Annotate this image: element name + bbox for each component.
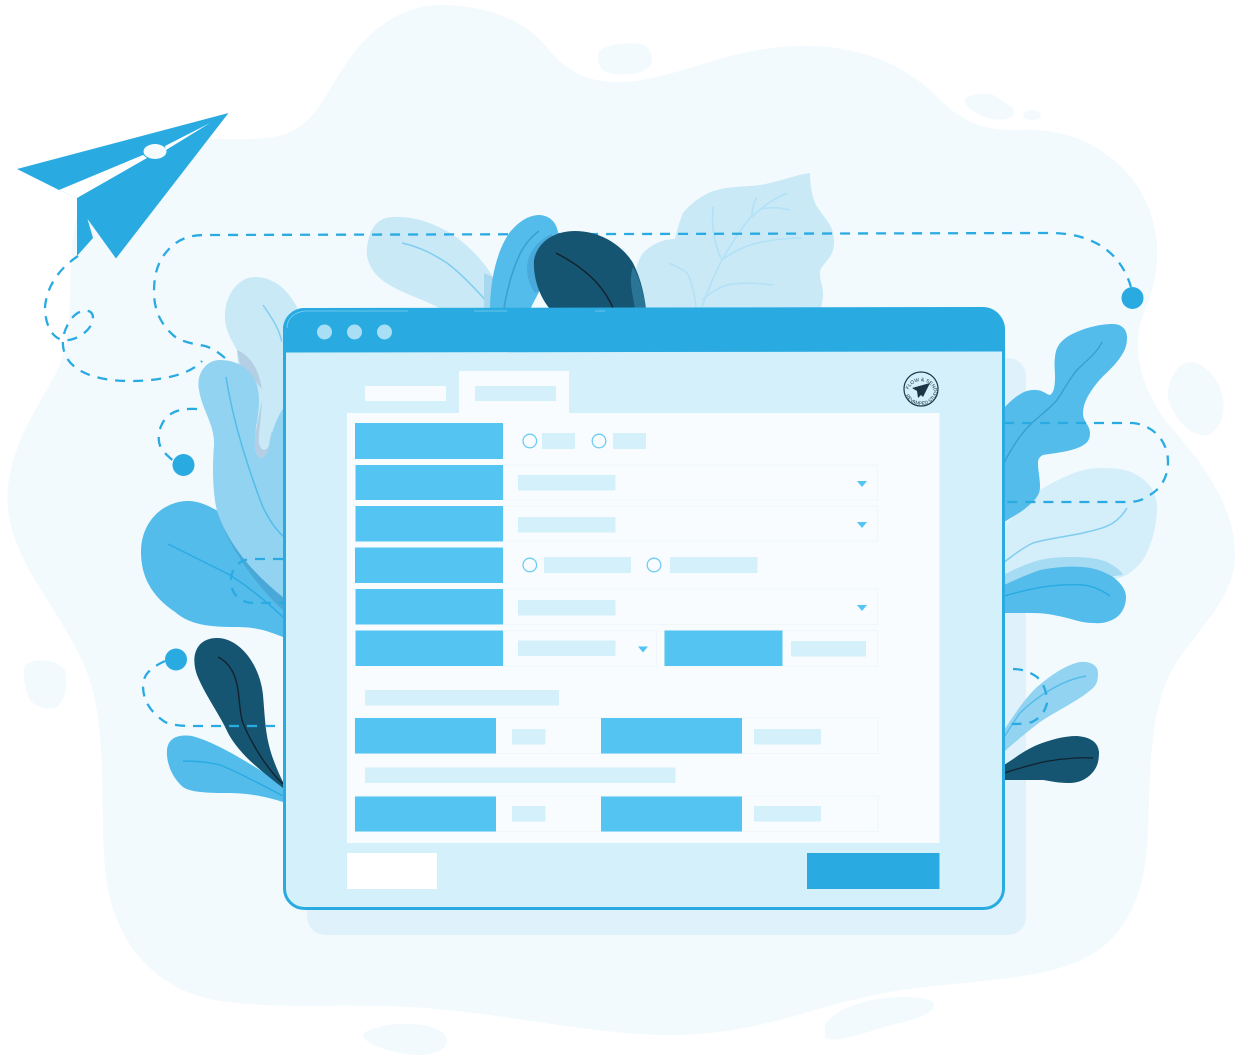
row 8: two fields: [355, 796, 878, 832]
section heading bar 1: [365, 690, 559, 706]
long dashed flight path: [45, 233, 1131, 381]
leaf: top mid blue: [1004, 324, 1127, 522]
leaf: pale big: [1004, 468, 1157, 600]
row 7: two fields: [355, 718, 878, 754]
row 1: radios: [355, 423, 646, 459]
row 2: select: [356, 465, 878, 500]
section heading bar 2: [365, 768, 676, 783]
row 4: radios: [355, 548, 758, 583]
window body: [284, 310, 1004, 908]
leaf: pale-blue band: [1004, 557, 1123, 590]
leaf shadow: [527, 234, 560, 293]
stamp badge: FLOW & SEND: [906, 378, 938, 392]
active tab: [459, 371, 569, 414]
row 5: select: [356, 589, 878, 624]
leaf: dark navy: [194, 638, 283, 788]
leaf: mid blue: [1004, 567, 1126, 623]
remaining dashed paths: [143, 409, 1168, 726]
browser window: [283, 307, 1005, 910]
inactive tab: [365, 386, 446, 401]
leaf: pale left: [367, 217, 500, 310]
leaves right of window: [1004, 324, 1157, 783]
leaf: dark navy: [1004, 736, 1099, 783]
leaf: light blue: [1004, 662, 1098, 752]
window drop shadow: [307, 358, 1026, 935]
window control dots: [317, 324, 392, 340]
row 6: select and field: [356, 630, 878, 666]
leaf: mid blue round: [141, 501, 283, 637]
leaf: dark navy: [534, 231, 646, 309]
leaf: pale tall: [225, 277, 300, 470]
secondary button: [347, 853, 437, 889]
stamp badge: [903, 371, 939, 407]
path endpoint dots: [165, 287, 1144, 670]
title bar: [283, 307, 1005, 352]
form panel: [347, 413, 940, 843]
paper plane: [17, 113, 228, 258]
pale tongue: [259, 340, 285, 450]
stamp badge: REVAMPED STUDIO: [906, 392, 937, 405]
leaves left of window: [141, 277, 300, 802]
primary button: [807, 853, 940, 889]
leaf: pale large right: [632, 173, 834, 310]
leaf: mid blue: [490, 215, 560, 310]
leaf: light blue tall: [198, 360, 284, 598]
leaves at the top: [490, 215, 646, 310]
pale leaves at the top: [367, 173, 834, 310]
leaf: mid blue low: [167, 736, 283, 802]
row 3: select: [356, 506, 878, 542]
leaf shadow: [237, 350, 272, 462]
